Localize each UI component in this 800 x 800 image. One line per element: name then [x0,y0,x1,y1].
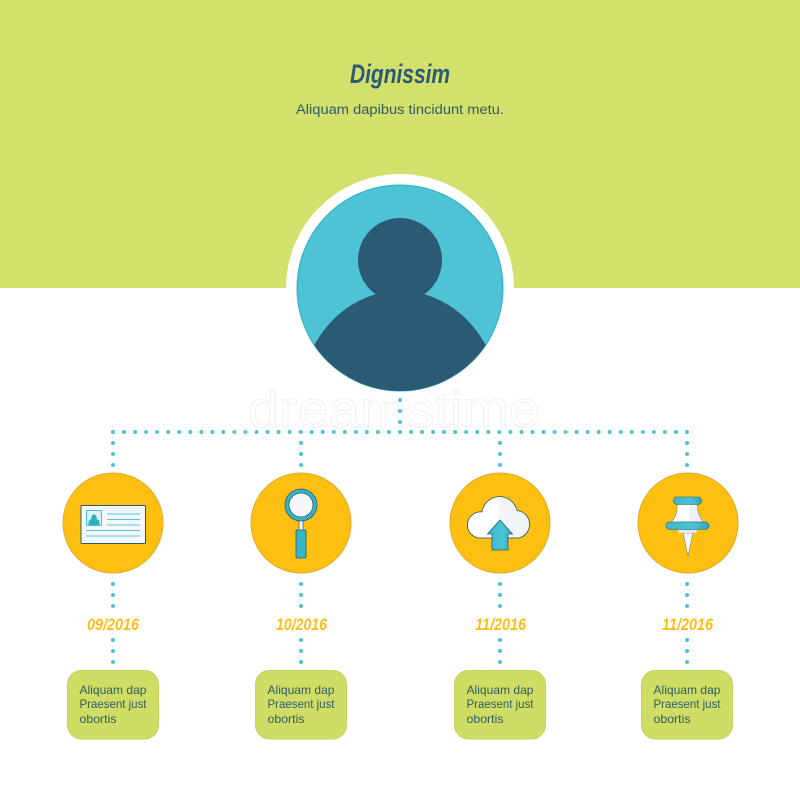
icon: magnifying glass [251,473,351,573]
text box 1: obortis [80,712,116,726]
title: Dignissim [350,59,450,89]
icon: push pin [638,473,738,573]
text box 1: Aliquam dap [80,683,147,697]
date 1: 09/2016 [87,615,139,634]
text box 3 [454,670,546,739]
text box 2: Aliquam dap [268,683,335,697]
text box 2: obortis [268,712,304,726]
text box 3: Aliquam dap [466,683,534,697]
avatar icon [286,174,514,402]
text box 4: Praesent just [654,697,721,711]
text box 1: Praesent just [80,697,147,711]
watermark: dreamstime [248,381,540,439]
icon: ID card [63,473,163,573]
text box 3: obortis [466,712,504,726]
text box 4: Aliquam dap [654,683,721,697]
header band [0,0,800,288]
text box 3: Praesent just [466,697,534,711]
text box 1 [68,670,158,739]
subtitle: Aliquam dapibus tincidunt metu. [296,102,504,117]
text box 2: Praesent just [268,697,335,711]
icon: cloud upload [450,473,550,573]
text box 2 [256,670,346,739]
date 3: 11/2016 [475,615,526,634]
dotted connector network [113,400,688,663]
date 4: 11/2016 [662,615,713,634]
date 2: 10/2016 [276,615,327,634]
text box 4: obortis [654,712,690,726]
text box 4 [642,670,732,739]
